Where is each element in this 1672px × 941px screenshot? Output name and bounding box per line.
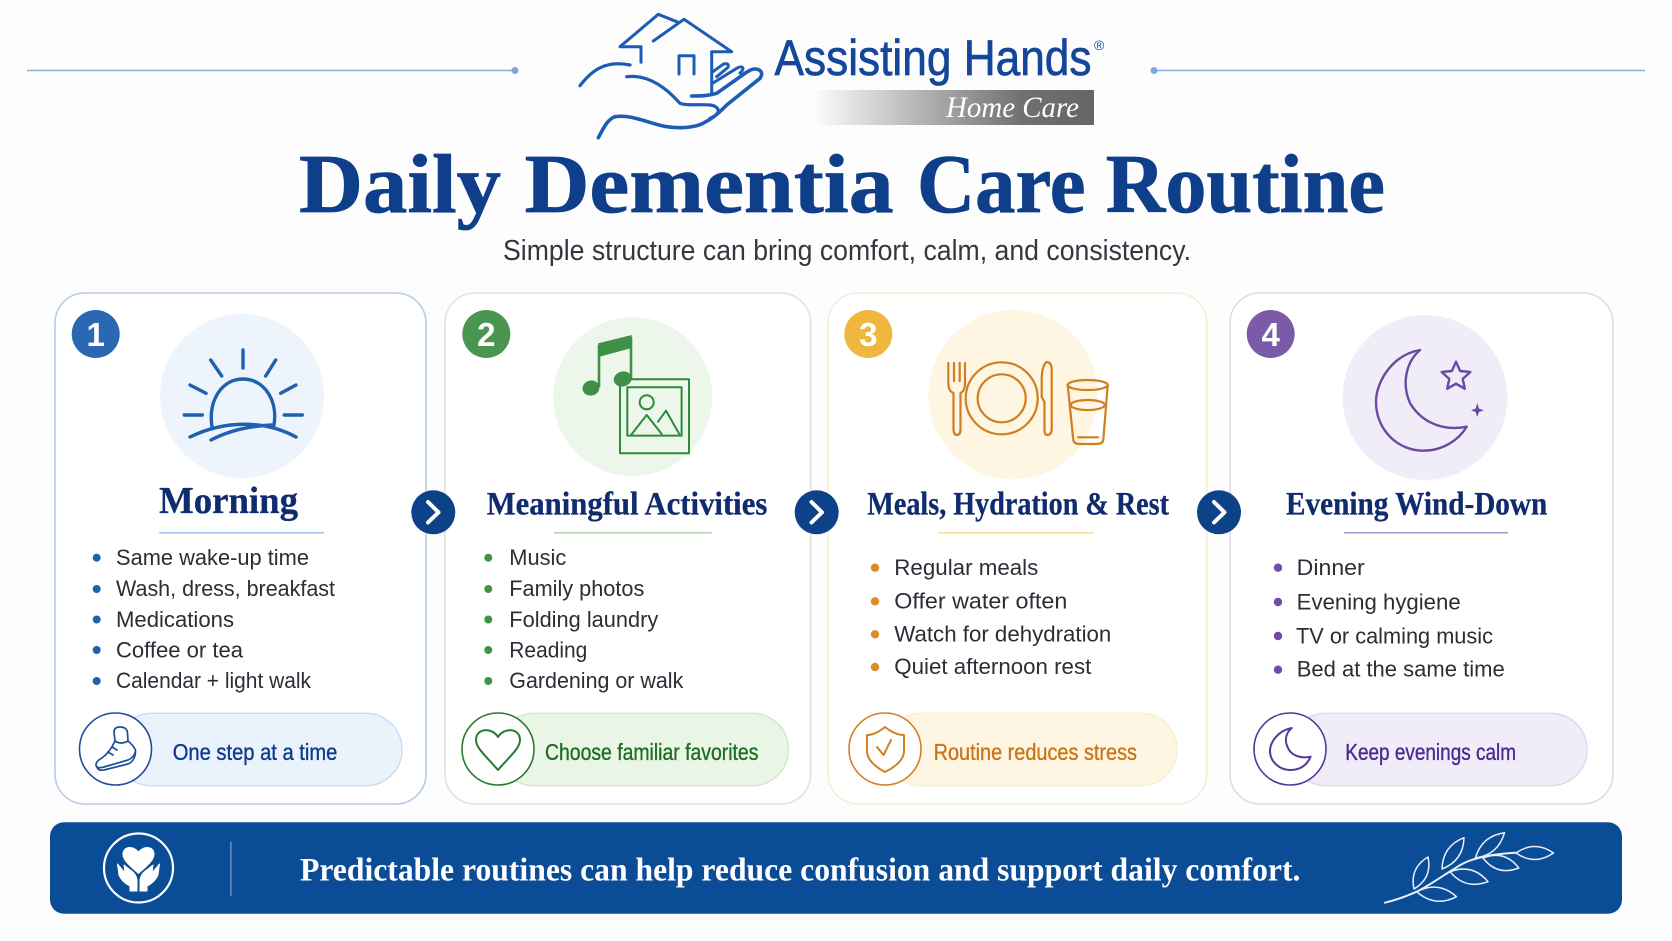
list: Regular meals	[894, 555, 1038, 580]
header rule right	[1150, 67, 1645, 74]
step badge 1	[72, 310, 120, 358]
list: Gardening or walk	[509, 668, 684, 693]
list: Family photos	[509, 576, 644, 601]
heading underline	[1344, 532, 1508, 534]
list: Same wake-up time	[116, 545, 309, 570]
list: Evening hygiene	[1297, 589, 1461, 614]
list: Calendar + light walk	[116, 668, 312, 693]
registered mark: ®	[1094, 37, 1105, 53]
list: Bed at the same time	[1297, 657, 1505, 682]
header rule left	[27, 67, 518, 74]
logo: Assisting Hands Home Care	[580, 14, 1105, 138]
callout: one step at a time	[80, 713, 402, 786]
list: Watch for dehydration	[894, 622, 1111, 647]
title: Daily	[299, 138, 501, 231]
panel: meals hydration and rest	[828, 293, 1207, 804]
logo wordmark: Assisting Hands	[774, 30, 1092, 86]
home care bar	[810, 90, 1094, 125]
step badge 4: 4	[1262, 316, 1281, 353]
list: Reading	[509, 638, 587, 662]
heading: Meaningful Activities	[487, 486, 767, 522]
icon: sunrise	[160, 314, 324, 478]
heading underline	[554, 532, 712, 534]
bottom banner	[50, 822, 1622, 914]
step badge 3	[844, 310, 892, 358]
heading: Morning	[159, 480, 298, 522]
heading: Evening Wind-Down	[1286, 486, 1547, 522]
list: Offer water often	[894, 588, 1067, 613]
callout: routine reduces stress: Routine reduces stress	[934, 739, 1137, 765]
list: Music	[509, 545, 566, 570]
list: Medications	[116, 607, 234, 632]
list	[871, 555, 1111, 679]
icon: plate, cutlery and glass	[928, 310, 1108, 479]
panel: meaningful activities	[445, 293, 811, 804]
icon: music note and photo	[553, 317, 712, 476]
step badge 2: 2	[477, 316, 495, 353]
title	[299, 138, 1385, 231]
step badge 1: 1	[87, 316, 105, 353]
list	[1274, 555, 1505, 682]
banner divider	[230, 842, 232, 896]
callout: routine reduces stress	[849, 713, 1177, 786]
step badge 4	[1247, 310, 1295, 358]
callout: keep evenings calm	[1254, 713, 1587, 786]
heading underline	[159, 532, 324, 534]
title: Routine	[1106, 138, 1385, 231]
home care text: Home Care	[945, 91, 1079, 124]
callout: one step at a time: One step at a time	[173, 739, 337, 765]
callout: keep evenings calm: Keep evenings calm	[1345, 739, 1516, 765]
icon: leaf branch	[1385, 833, 1554, 903]
list	[93, 545, 335, 693]
title: Care	[917, 138, 1086, 231]
list: Coffee or tea	[116, 638, 244, 662]
panel: morning	[55, 293, 426, 804]
icon: house in hand	[580, 14, 762, 138]
callout: choose familiar favorites	[462, 713, 788, 786]
subtitle: Simple structure can bring comfort, calm, and consistency.	[503, 235, 1191, 267]
list: TV or calming music	[1296, 623, 1493, 648]
heading underline	[938, 532, 1094, 534]
step badge 2	[462, 310, 510, 358]
title: Dementia	[525, 138, 894, 231]
banner text: Predictable routines can help reduce confusion and support daily comfort.	[300, 853, 1300, 889]
icon: moon and star	[1342, 315, 1508, 480]
list	[484, 545, 684, 693]
arrow 1	[411, 490, 455, 534]
heading: Meals, Hydration & Rest	[867, 486, 1169, 522]
panel: evening wind-down	[1230, 293, 1613, 804]
list: Folding laundry	[509, 607, 658, 632]
icon: heart in hands	[104, 834, 173, 902]
step badge 3: 3	[859, 316, 877, 353]
list: Wash, dress, breakfast	[116, 576, 335, 601]
list: Quiet afternoon rest	[894, 654, 1091, 679]
list: Dinner	[1297, 555, 1365, 580]
arrow 3	[1197, 490, 1241, 534]
arrow 2	[795, 490, 839, 534]
callout: choose familiar favorites: Choose familiar favorites	[545, 739, 758, 765]
